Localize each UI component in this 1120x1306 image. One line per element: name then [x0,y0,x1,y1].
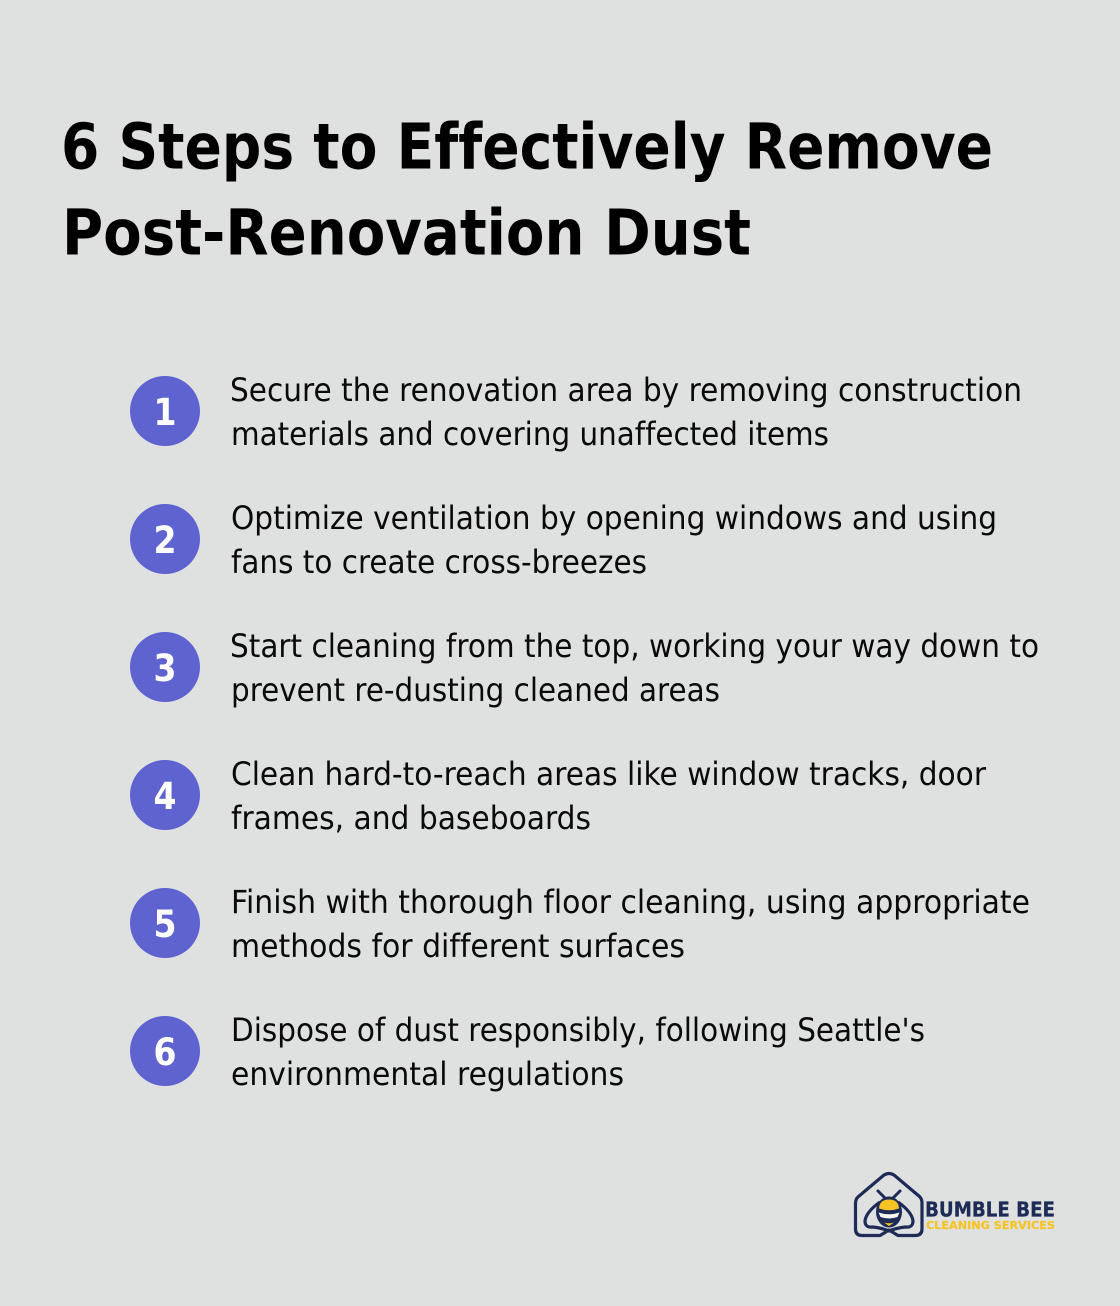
logo wordmark: BUMBLE BEE [925,1198,1055,1222]
title [61,110,993,270]
icon: house with bee [856,1174,922,1236]
step 5 text [231,883,1030,965]
step 6 text: environmental regulations [231,1055,624,1093]
step 4 text: frames, and baseboards [231,799,591,837]
logo wordmark [925,1198,1055,1232]
step 3 text: Start cleaning from the top, working your way down to [230,627,1039,665]
step 6 [130,1011,925,1093]
step 5 text: Finish with thorough floor cleaning, using appropriate [231,883,1030,921]
number badge 6 [130,1016,200,1086]
step 1 text: materials and covering unaffected items [231,415,829,453]
number badge 4 [130,760,200,830]
step 2 text [231,499,997,581]
step 1 text: Secure the renovation area by removing construction [230,371,1022,409]
number badge 5: 5 [154,903,176,946]
step 1 text [230,371,1022,453]
number badge 3: 3 [154,647,176,690]
number badge 3 [130,632,200,702]
step 3 text [230,627,1039,709]
step 6 text [231,1011,925,1093]
step 2 text: fans to create cross-breezes [231,543,647,581]
step 3 text: prevent re-dusting cleaned areas [231,671,720,709]
logo: Bumble Bee Cleaning Services [856,1174,1055,1236]
title: Post-Renovation Dust [62,196,751,270]
step 1 [130,371,1022,453]
title: 6 Steps to Effectively Remove [61,110,993,184]
step 5 [130,883,1030,965]
step 5 text: methods for different surfaces [231,927,685,965]
number badge 2 [130,504,200,574]
number badge 5 [130,888,200,958]
number badge 2: 2 [154,519,176,562]
step 4 [130,755,987,837]
step 6 text: Dispose of dust responsibly, following Seattle's [231,1011,925,1049]
logo wordmark: CLEANING SERVICES [926,1219,1055,1232]
number badge 1: 1 [154,391,176,434]
step 2 text: Optimize ventilation by opening windows and using [231,499,997,537]
step 4 text: Clean hard-to-reach areas like window tracks, door [231,755,987,793]
number badge 6: 6 [154,1031,176,1074]
number badge 4: 4 [154,775,176,818]
number badge 1 [130,376,200,446]
step 3 [130,627,1039,709]
step 2 [130,499,997,581]
step 4 text [231,755,987,837]
